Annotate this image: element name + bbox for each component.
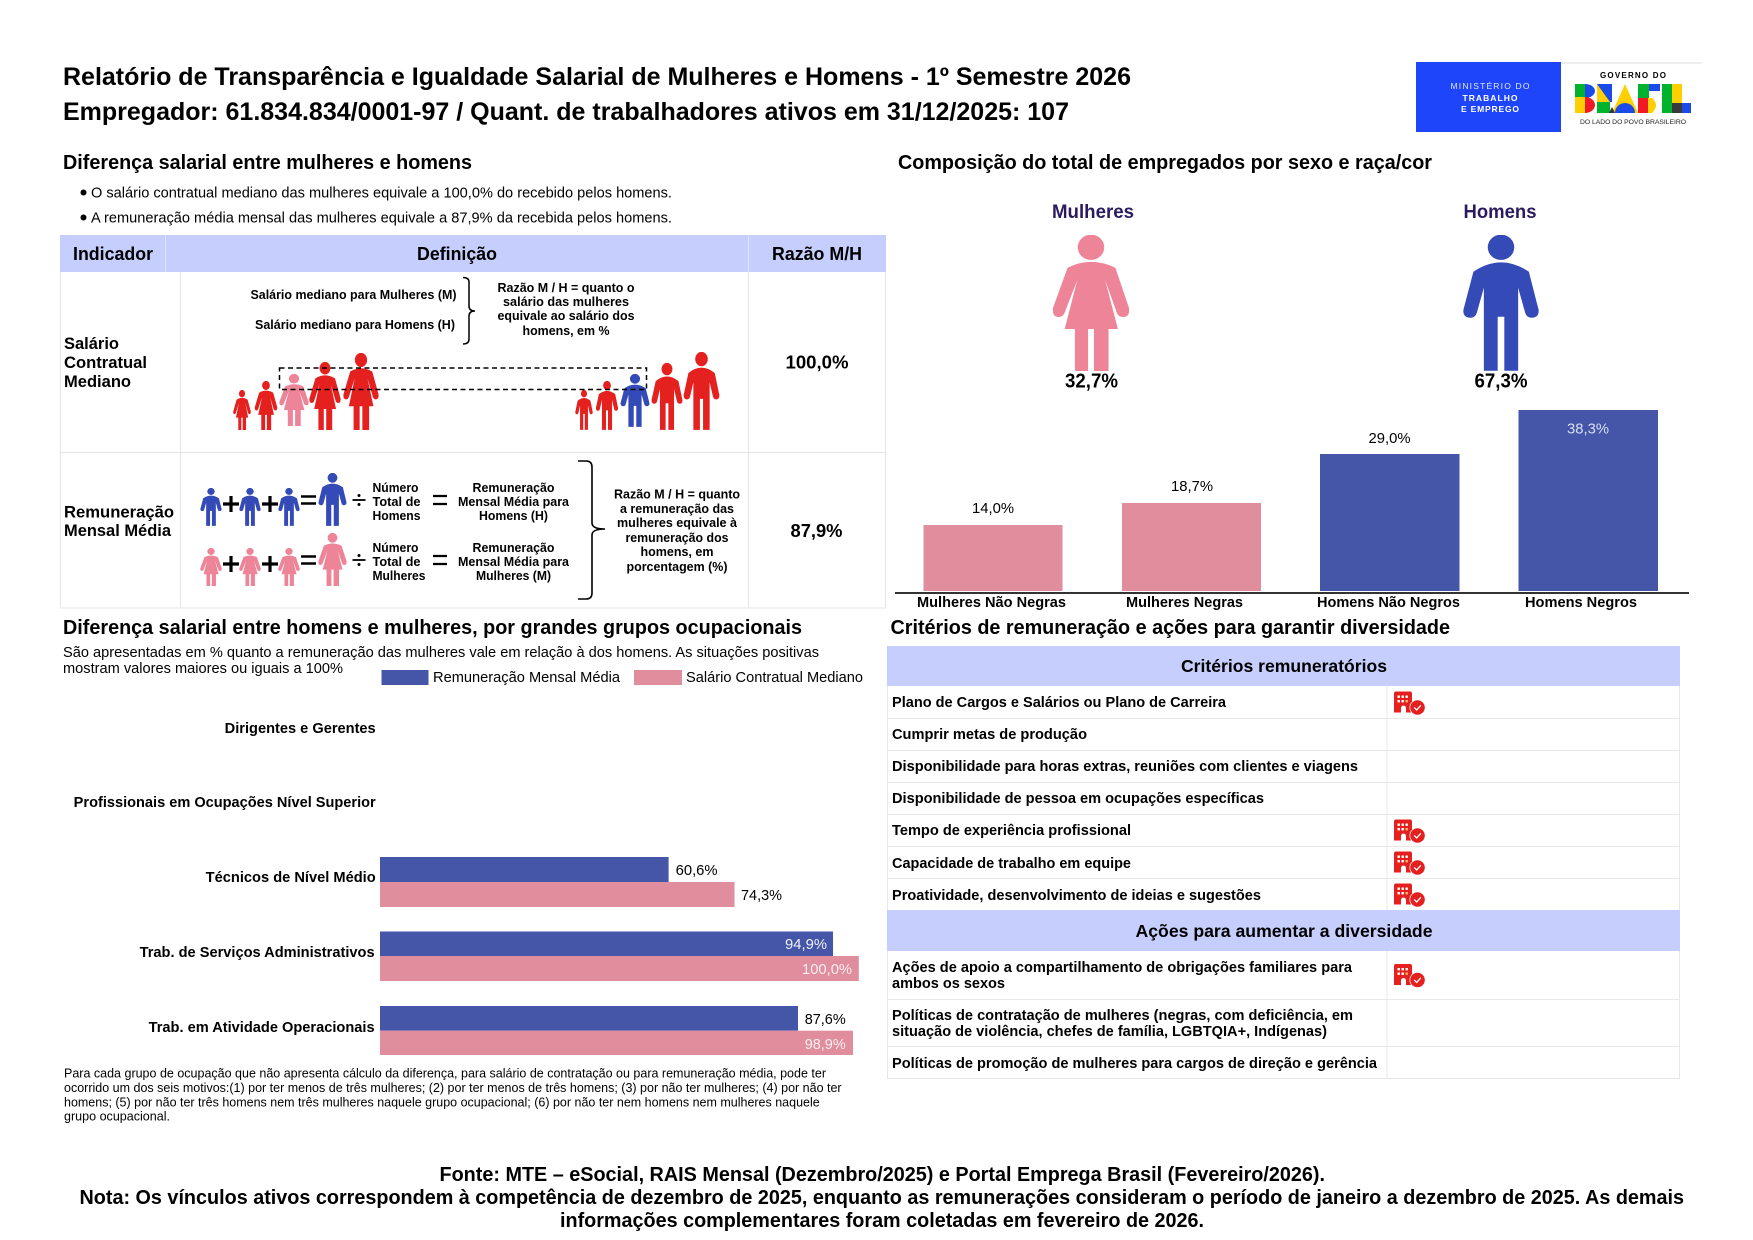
group: atividade operacional xyxy=(380,1006,853,1055)
definition text: razão M/H remuneração: homens, em xyxy=(640,544,714,559)
formula: men average: Remuneração xyxy=(472,481,555,495)
table header: critérios remuneratórios: Critérios remuneratórios xyxy=(1181,656,1387,676)
criteria rows: Cumprir metas de produção xyxy=(892,727,1087,743)
row label: remuneração mensal média: Mensal Média xyxy=(64,521,172,540)
group: técnicos: 60,6% xyxy=(676,862,718,879)
heading: diferença salarial: Diferença salarial entre mulheres e homens xyxy=(63,152,472,174)
table header xyxy=(60,235,886,272)
action rows: ambos os sexos xyxy=(892,976,1005,992)
footnote: grupo ocupacional. xyxy=(64,1108,170,1124)
row label: salário contratual mediano: Salário xyxy=(64,334,119,353)
table header: ações: Ações para aumentar a diversidade xyxy=(1136,921,1433,941)
bar chart: occupational groups: Trab. de Serviços Administrativos xyxy=(140,945,375,961)
logo: ministério e governo do brasil: GOVERNO DO xyxy=(1600,71,1666,80)
definition text: razão M/H remuneração: mulheres equivale à xyxy=(617,515,738,530)
row label: remuneração mensal média: Remuneração xyxy=(64,502,174,522)
logo: ministério e governo do brasil: DO LADO DO POVO BRASILEIRO xyxy=(1580,119,1686,126)
formula: women average: Remuneração xyxy=(472,541,555,555)
panel: homens share xyxy=(1463,202,1539,392)
criteria rows: Plano de Cargos e Salários ou Plano de Carreira xyxy=(892,695,1227,711)
row label: salário contratual mediano: Mediano xyxy=(64,372,131,391)
definition text: razão M/H remuneração: Razão M / H = quanto xyxy=(614,486,740,502)
formula: men average: Mensal Média para xyxy=(458,495,570,509)
logo: ministério e governo do brasil: MINISTÉRIO DO xyxy=(1450,81,1530,91)
icons: company adopts criterion xyxy=(1394,692,1426,988)
heading: critérios: Critérios de remuneração e ações para garantir diversidade xyxy=(890,617,1450,639)
icon: woman xyxy=(1053,235,1129,371)
table header: Indicador xyxy=(73,244,153,264)
bar chart: occupational groups: Dirigentes e Gerentes xyxy=(225,721,376,737)
action rows: Ações de apoio a compartilhamento de obrigações familiares para xyxy=(892,960,1353,976)
definition text: razão M/H remuneração xyxy=(614,486,740,574)
heading: composição: Composição do total de empregados por sexo e raça/cor xyxy=(898,152,1432,174)
big brace xyxy=(578,461,605,599)
panel: indicator table xyxy=(60,235,886,608)
table header: Definição xyxy=(417,244,497,264)
action rows: Políticas de promoção de mulheres para cargos de direção e gerência xyxy=(892,1056,1378,1072)
bar chart: occupational groups: Técnicos de Nível Médio xyxy=(206,870,376,886)
description text: São apresentadas em % quanto a remuneração das mulheres vale em relação à dos homens. As situações positivas xyxy=(63,645,819,661)
bar chart: composition by race: 38,3% xyxy=(1567,420,1609,438)
group: técnicos: 74,3% xyxy=(741,887,782,904)
bar chart: occupational groups xyxy=(74,721,859,1055)
row label: remuneração mensal média xyxy=(64,502,174,540)
bar chart: composition by race: 29,0% xyxy=(1368,430,1410,447)
formula: men average: Total de xyxy=(372,495,421,509)
chart legend xyxy=(382,670,863,686)
definition text: razão M/H remuneração: porcentagem (%) xyxy=(626,559,728,574)
chart legend: Salário Contratual Mediano xyxy=(686,670,863,686)
title xyxy=(63,63,1131,126)
footer source note: informações complementares foram coletadas em fevereiro de 2026. xyxy=(560,1210,1204,1232)
footnote: Para cada grupo de ocupação que não apresenta cálculo da diferença, para salário de contratação ou para remuneração média, pode ter xyxy=(64,1066,827,1080)
formula: men average xyxy=(200,473,570,526)
bar chart: occupational groups: Profissionais em Ocupações Nível Superior xyxy=(74,795,376,811)
table header: critérios remuneratórios xyxy=(887,646,1680,686)
group: técnicos xyxy=(380,857,782,907)
logo: ministério e governo do brasil xyxy=(1416,62,1702,132)
formula: women average: Número xyxy=(372,541,419,555)
footnote: ocorrido um dos seis motivos:(1) por ter menos de três mulheres; (2) por ter menos de três homens; (3) por não ter mulheres; (4) por não ter xyxy=(64,1080,842,1095)
table header: ações xyxy=(887,910,1680,951)
title: Relatório de Transparência e Igualdade Salarial de Mulheres e Homens - 1º Semestre 2026 xyxy=(63,63,1131,91)
formula: women average: Mulheres xyxy=(372,569,426,583)
footer source note xyxy=(80,1164,1684,1232)
formula: men average: Número xyxy=(372,481,419,495)
chart legend: Remuneração Mensal Média xyxy=(433,670,621,686)
definition text: razão M/H remuneração: remuneração dos xyxy=(626,530,728,545)
definition text: salário mediano: Salário mediano para Homens (H) xyxy=(255,317,455,332)
bar chart: composition by race: Mulheres Não Negras xyxy=(917,594,1066,611)
icon: women ordered by pay xyxy=(233,353,379,430)
bar chart: composition by race: 14,0% xyxy=(972,500,1014,517)
panel: mulheres share xyxy=(1052,202,1134,392)
formula: women average: Total de xyxy=(372,555,421,569)
criteria rows: Tempo de experiência profissional xyxy=(892,823,1131,839)
bar chart: composition by race xyxy=(895,410,1689,611)
formula: men average: Homens xyxy=(372,509,421,523)
footer source note: Fonte: MTE – eSocial, RAIS Mensal (Dezembro/2025) e Portal Emprega Brasil (Fevereiro/2026). xyxy=(440,1164,1325,1186)
panel: mulheres share: 32,7% xyxy=(1065,370,1118,392)
group: serviços administrativos xyxy=(380,932,859,981)
footnote xyxy=(64,1066,842,1124)
row label: salário contratual mediano xyxy=(64,334,147,391)
group: atividade operacional: 98,9% xyxy=(805,1036,846,1053)
bar chart: composition by race: 18,7% xyxy=(1171,478,1213,495)
action rows: situação de violência, chefes de família, LGBTQIA+, Indígenas) xyxy=(892,1024,1327,1040)
group: atividade operacional: 87,6% xyxy=(805,1011,846,1028)
criteria rows: Disponibilidade de pessoa em ocupações específicas xyxy=(892,791,1264,807)
definition text: razão M/H salário: homens, em % xyxy=(522,323,610,338)
formula: women average xyxy=(200,533,570,586)
logo: ministério e governo do brasil: E EMPREGO xyxy=(1461,104,1519,114)
title: Empregador: 61.834.834/0001-97 / Quant. de trabalhadores ativos em 31/12/2025: 107 xyxy=(63,98,1069,126)
group: serviços administrativos: 100,0% xyxy=(802,961,852,978)
summary bullets: A remuneração média mensal das mulheres equivale a 87,9% da recebida pelos homens. xyxy=(91,210,672,226)
criteria rows: Disponibilidade para horas extras, reuniões com clientes e viagens xyxy=(892,759,1358,775)
brace xyxy=(463,278,475,344)
panel: homens share: Homens xyxy=(1464,202,1536,223)
formula: men average: Homens (H) xyxy=(479,509,548,523)
dashed median comparison box xyxy=(280,368,646,390)
definition text: razão M/H salário xyxy=(498,280,635,338)
summary bullets xyxy=(80,184,672,226)
panel: mulheres share: Mulheres xyxy=(1052,202,1134,223)
criteria rows: Proatividade, desenvolvimento de ideias e sugestões xyxy=(892,888,1261,904)
description text: mostram valores maiores ou iguais a 100% xyxy=(63,661,343,677)
icon: men ordered by pay xyxy=(575,352,719,430)
panel: criteria table xyxy=(887,646,1680,1078)
definition text: razão M/H salário: equivale ao salário dos xyxy=(498,308,634,323)
definition text: salário mediano xyxy=(250,287,456,332)
formula: women average: Mensal Média para xyxy=(458,555,570,569)
group: serviços administrativos: 94,9% xyxy=(785,936,827,953)
action rows xyxy=(892,960,1378,1072)
action rows: Políticas de contratação de mulheres (negras, com deficiência, em xyxy=(892,1008,1353,1024)
table header: Razão M/H xyxy=(772,244,862,264)
panel: homens share: 67,3% xyxy=(1474,370,1528,392)
bar chart: composition by race: Mulheres Negras xyxy=(1126,594,1243,611)
bar chart: composition by race: Homens Não Negros xyxy=(1317,594,1460,611)
definition text: razão M/H salário: Razão M / H = quanto o xyxy=(498,280,635,295)
description text xyxy=(63,645,819,677)
icon: man xyxy=(1463,235,1539,371)
footnote: homens; (5) por não ter três homens nem três mulheres naquele grupo ocupacional; (6) por não ter nem homens nem mulheres naquele xyxy=(64,1094,820,1110)
value: 100,0%: 100,0% xyxy=(786,352,848,372)
logo: ministério e governo do brasil: TRABALHO xyxy=(1462,93,1518,103)
summary bullets: O salário contratual mediano das mulheres equivale a 100,0% do recebido pelos homens. xyxy=(91,184,672,202)
criteria rows: Capacidade de trabalho em equipe xyxy=(892,856,1131,872)
value: 87,9%: 87,9% xyxy=(790,521,842,541)
definition text: razão M/H salário: salário das mulheres xyxy=(503,294,629,309)
heading: grupos ocupacionais: Diferença salarial entre homens e mulheres, por grandes grupos ocupacionais xyxy=(63,617,802,639)
bar chart: occupational groups: Trab. em Atividade Operacionais xyxy=(149,1020,375,1036)
footer source note: Nota: Os vínculos ativos correspondem à competência de dezembro de 2025, enquanto as remunerações consideram o período de janeiro a dezembro de 2025. As demais xyxy=(80,1187,1684,1209)
definition text: salário mediano: Salário mediano para Mulheres (M) xyxy=(250,287,456,302)
definition text: razão M/H remuneração: a remuneração das xyxy=(620,501,734,516)
row label: salário contratual mediano: Contratual xyxy=(64,353,147,372)
formula: women average: Mulheres (M) xyxy=(476,569,551,583)
bar chart: composition by race: Homens Negros xyxy=(1525,594,1637,611)
criteria rows xyxy=(892,695,1358,904)
